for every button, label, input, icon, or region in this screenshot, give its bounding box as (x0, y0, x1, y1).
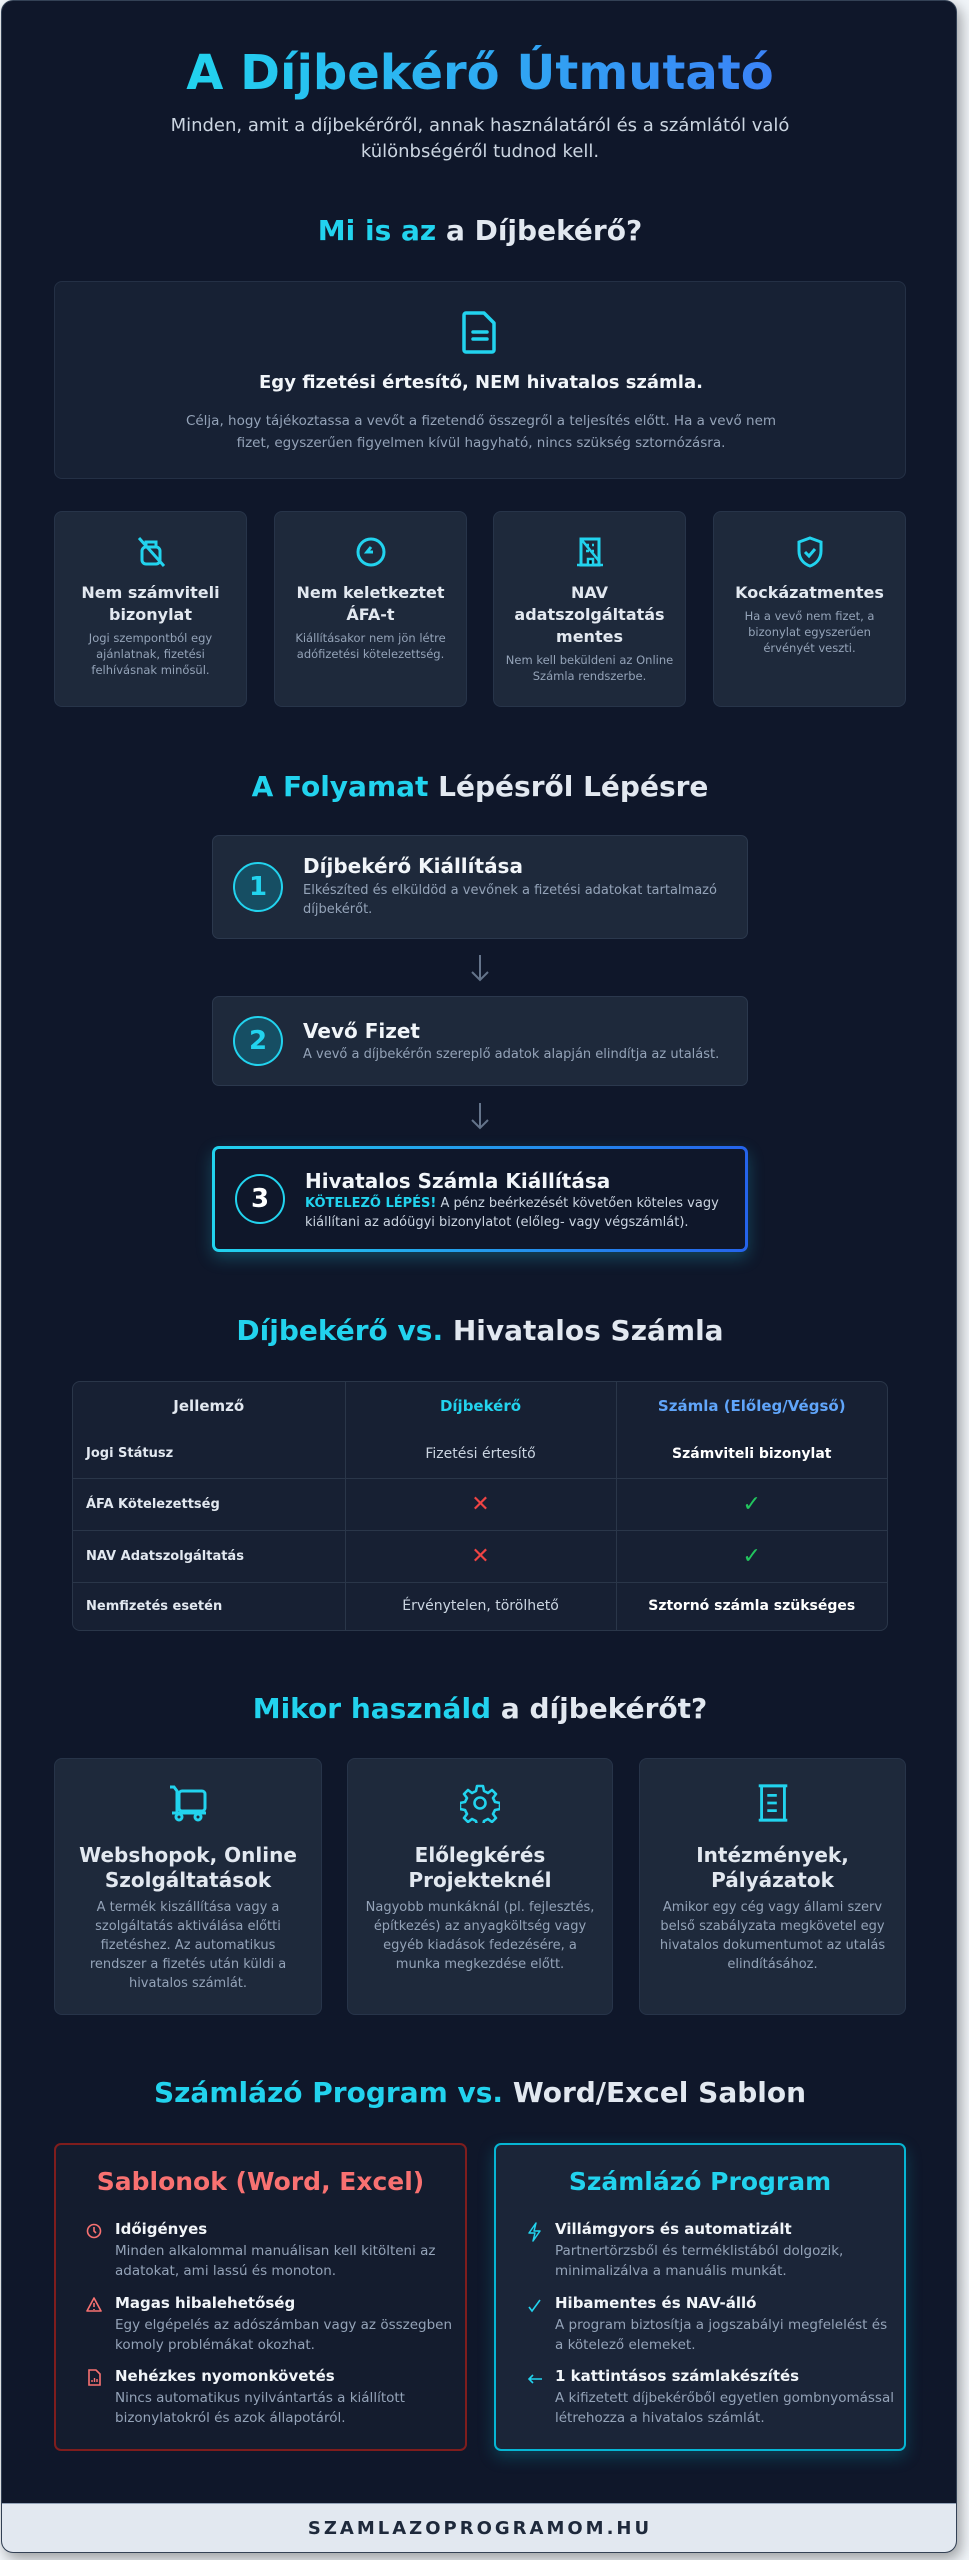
comparison table: Jellemző (173, 1397, 244, 1415)
heading: Mi is az: Mi is az a Díjbekérő? (318, 214, 642, 247)
item: hiba (86, 2294, 452, 2353)
footer (2, 2503, 958, 2554)
feature card: Kockázatmentes: Ha a vevő nem fizet, a bizonylat egyszerűen érvényét veszti. (745, 609, 874, 655)
comparison table: Számla (Előleg/Végső) (658, 1397, 846, 1415)
comparison table: Díjbekérő (440, 1397, 521, 1415)
use card: webshop: A termék kiszállítása vagy a szolgáltatás aktiválása előtti fizetéshez. Az automatikus rendszer a fizetés után küldi a hivatalos számlát. (90, 1900, 286, 1991)
item: idoigenyes (86, 2220, 436, 2279)
step 2: A vevő a díjbekérőn szereplő adatok alapján elindítja az utalást. (303, 1047, 719, 1062)
comparison table: Fizetési értesítő (425, 1446, 536, 1462)
panel: templates: Egy elgépelés az adószámban vagy az összegben komoly problémákat okozhat. (115, 2317, 452, 2353)
step 3: KÖTELEZŐ LÉPÉS! A pénz beérkezését követően köteles vagy kiállítani az adóügyi bizonylatot (előleg- vagy végszámlát). (305, 1196, 719, 1230)
panel: templates: Nincs automatikus nyilvántartás a kiállított bizonylatokról és azok állapotáról. (115, 2390, 405, 2426)
feature card: NAV: NAV adatszolgáltatás mentes (514, 583, 665, 646)
panel: templates: Minden alkalommal manuálisan kell kitölteni az adatokat, ami lassú és monoton. (115, 2243, 436, 2279)
panel: program: A program biztosítja a jogszabályi megfelelést és a kötelező elemeket. (555, 2317, 887, 2353)
comparison table: Érvénytelen, törölhető (402, 1598, 559, 1614)
icon: document (462, 311, 496, 354)
heading: Mikor: Mikor használd a díjbekérőt? (253, 1692, 707, 1725)
arrow 2 (471, 1103, 489, 1130)
use card: webshop: Webshopok, Online Szolgáltatások (79, 1843, 297, 1892)
feature card: ÁFA: Nem keletkeztet ÁFA-t (296, 583, 445, 624)
comparison table: ✓ (743, 1544, 761, 1568)
comparison table: ✕ (471, 1492, 490, 1516)
subtitle: Minden, amit a díjbekérőről, annak használatáról és a számlától való különbségéről tudnod kell. (171, 115, 789, 162)
panel: definition (54, 281, 906, 479)
icon: building (577, 538, 603, 566)
step 1 (212, 835, 748, 939)
use card: elolegkeres (347, 1758, 613, 2015)
feature card: ÁFA (274, 511, 467, 707)
step 3: Hivatalos Számla Kiállítása (305, 1169, 610, 1193)
comparison table: NAV Adatszolgáltatás (86, 1548, 244, 1564)
arrow 1 (471, 955, 489, 982)
panel: program: Hibamentes és NAV-álló (555, 2294, 756, 2312)
step 3 (212, 1146, 748, 1252)
item: nyomonkovetes (88, 2367, 405, 2426)
comparison table: Jogi Státusz (86, 1446, 173, 1461)
panel: program: Partnertörzsből és terméklistából dolgozik, minimalizálva a manuális munkát. (555, 2243, 843, 2279)
comparison table: ✓ (743, 1492, 761, 1516)
comparison table: Sztornó számla szükséges (648, 1598, 855, 1614)
comparison table: ✕ (471, 1544, 490, 1568)
icon: gear (460, 1784, 500, 1823)
use card: webshop (54, 1758, 322, 2015)
templates heading: Sablonok (Word, Excel) (97, 2167, 424, 2196)
feature card: Nem számviteli (54, 511, 247, 707)
step 2 (212, 996, 748, 1086)
feature card: NAV (493, 511, 686, 707)
feature card: Kockázatmentes (713, 511, 906, 707)
icon: clock (356, 538, 386, 566)
step 1: Díjbekérő Kiállítása (303, 854, 523, 878)
panel: templates: Időigényes (115, 2220, 207, 2238)
comparison table: Számviteli bizonylat (672, 1446, 831, 1462)
panel: program: 1 kattintásos számlakészítés (555, 2367, 799, 2385)
definition heading: Egy fizetési értesítő, NEM hivatalos számla. (259, 372, 703, 393)
step 2: Vevő Fizet (303, 1019, 420, 1043)
heading: Számlázó vs Sablon: Számlázó Program vs. Word/Excel Sablon (154, 2076, 806, 2109)
step 3: 3 (251, 1184, 269, 1214)
panel: program (494, 2143, 906, 2451)
use card: elolegkeres: Előlegkérés Projekteknél (408, 1843, 552, 1892)
item: hibamentes (528, 2294, 887, 2353)
use card: intezmenyek (639, 1758, 906, 2015)
comparison table (72, 1381, 888, 1631)
panel: templates: Magas hibalehetőség (115, 2294, 295, 2312)
panel: templates (54, 2143, 467, 2451)
feature card: Nem számviteli: Jogi szempontból egy ajánlatnak, fizetési felhívásnak minősül. (89, 631, 212, 677)
icon: crossed (138, 537, 165, 567)
program heading: Számlázó Program (569, 2167, 831, 2196)
icon: cart (170, 1786, 206, 1822)
feature card: Nem számviteli: Nem számviteli bizonylat (81, 583, 220, 624)
heading: vs: Díjbekérő vs. Hivatalos Számla (236, 1314, 724, 1347)
heading: Folyamat: A Folyamat Lépésről Lépésre (252, 770, 708, 803)
item: 1 kattintas (528, 2367, 894, 2426)
definition text: Célja, hogy tájékoztassa a vevőt a fizetendő összegről a teljesítés előtt. Ha a vevő nem fizet, egyszerűen figyelmen kívül hagyható, nincs szükség sztornózásra. (186, 413, 776, 451)
footer: SZAMLAZOPROGRAMOM.HU (308, 2518, 652, 2539)
comparison table: Nemfizetés esetén (86, 1599, 222, 1614)
icon: shield (798, 536, 822, 568)
panel: templates: Nehézkes nyomonkövetés (115, 2367, 335, 2385)
panel: program: Villámgyors és automatizált (555, 2220, 792, 2238)
icon: list doc (758, 1784, 788, 1822)
use card: intezmenyek: Amikor egy cég vagy állami szerv belső szabályzata megkövetel egy hivatalos dokumentumot az utalás elindításához. (660, 1900, 885, 1972)
comparison table: ÁFA Kötelezettség (86, 1496, 220, 1512)
feature card: ÁFA: Kiállításakor nem jön létre adófizetési kötelezettség. (295, 631, 446, 661)
item: villamgyors (528, 2220, 843, 2279)
use card: elolegkeres: Nagyobb munkáknál (pl. fejlesztés, építkezés) az anyagköltség vagy egyéb kiadások fedezésére, a munka megkezdése előtt. (366, 1900, 594, 1972)
step 1: Elkészíted és elküldöd a vevőnek a fizetési adatokat tartalmazó díjbekérőt. (303, 883, 717, 917)
use card: intezmenyek: Intézmények, Pályázatok (696, 1843, 849, 1892)
feature card: Kockázatmentes: Kockázatmentes (735, 583, 884, 602)
title: A Díjbekérő Útmutató (186, 45, 774, 101)
step 2: 2 (249, 1026, 267, 1056)
panel: program: A kifizetett díjbekérőből egyetlen gombnyomással létrehozza a hivatalos számlát. (555, 2390, 894, 2426)
step 1: 1 (249, 872, 267, 902)
feature card: NAV: Nem kell beküldeni az Online Számla rendszerbe. (506, 653, 673, 683)
